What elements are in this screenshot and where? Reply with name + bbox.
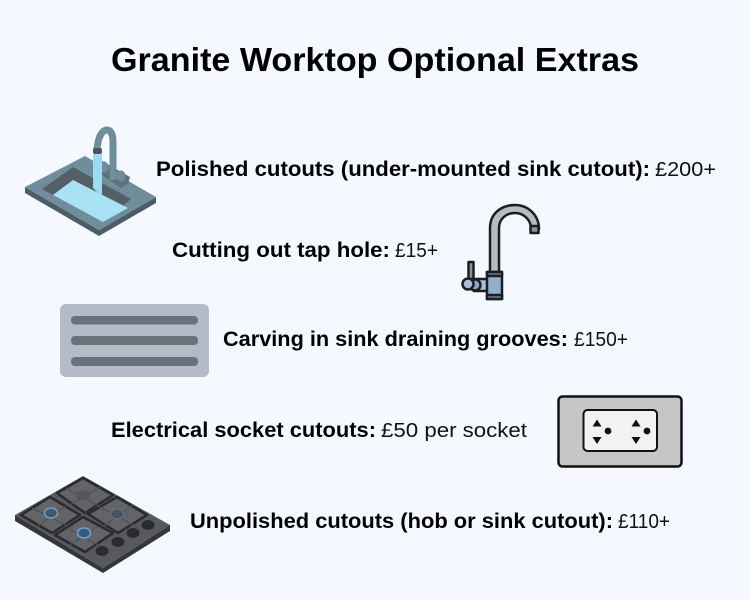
text: socket cutouts <box>111 419 527 442</box>
title: Granite Worktop Optional Extras <box>111 41 639 78</box>
text: polished cutouts: Polished cutouts (under-mounted sink cutout): <box>156 158 650 181</box>
icon: sink with running water <box>25 130 156 236</box>
text: tap hole: £15+ <box>395 240 438 262</box>
icon: electrical socket <box>558 396 682 466</box>
text: socket cutouts: Electrical socket cutouts: <box>111 419 376 442</box>
text: draining grooves: Carving in sink draining grooves: <box>223 328 568 351</box>
icon: draining grooves panel <box>60 304 209 377</box>
text: unpolished cutouts: Unpolished cutouts (hob or sink cutout): <box>190 510 613 533</box>
text: socket cutouts: £50 per socket <box>381 420 527 442</box>
icon: gas hob <box>15 476 170 573</box>
text: unpolished cutouts: £110+ <box>618 511 670 533</box>
text: polished cutouts: £200+ <box>655 159 716 181</box>
text: draining grooves: £150+ <box>574 329 628 351</box>
icon: tap <box>462 205 539 299</box>
text: tap hole: Cutting out tap hole: <box>172 239 390 262</box>
